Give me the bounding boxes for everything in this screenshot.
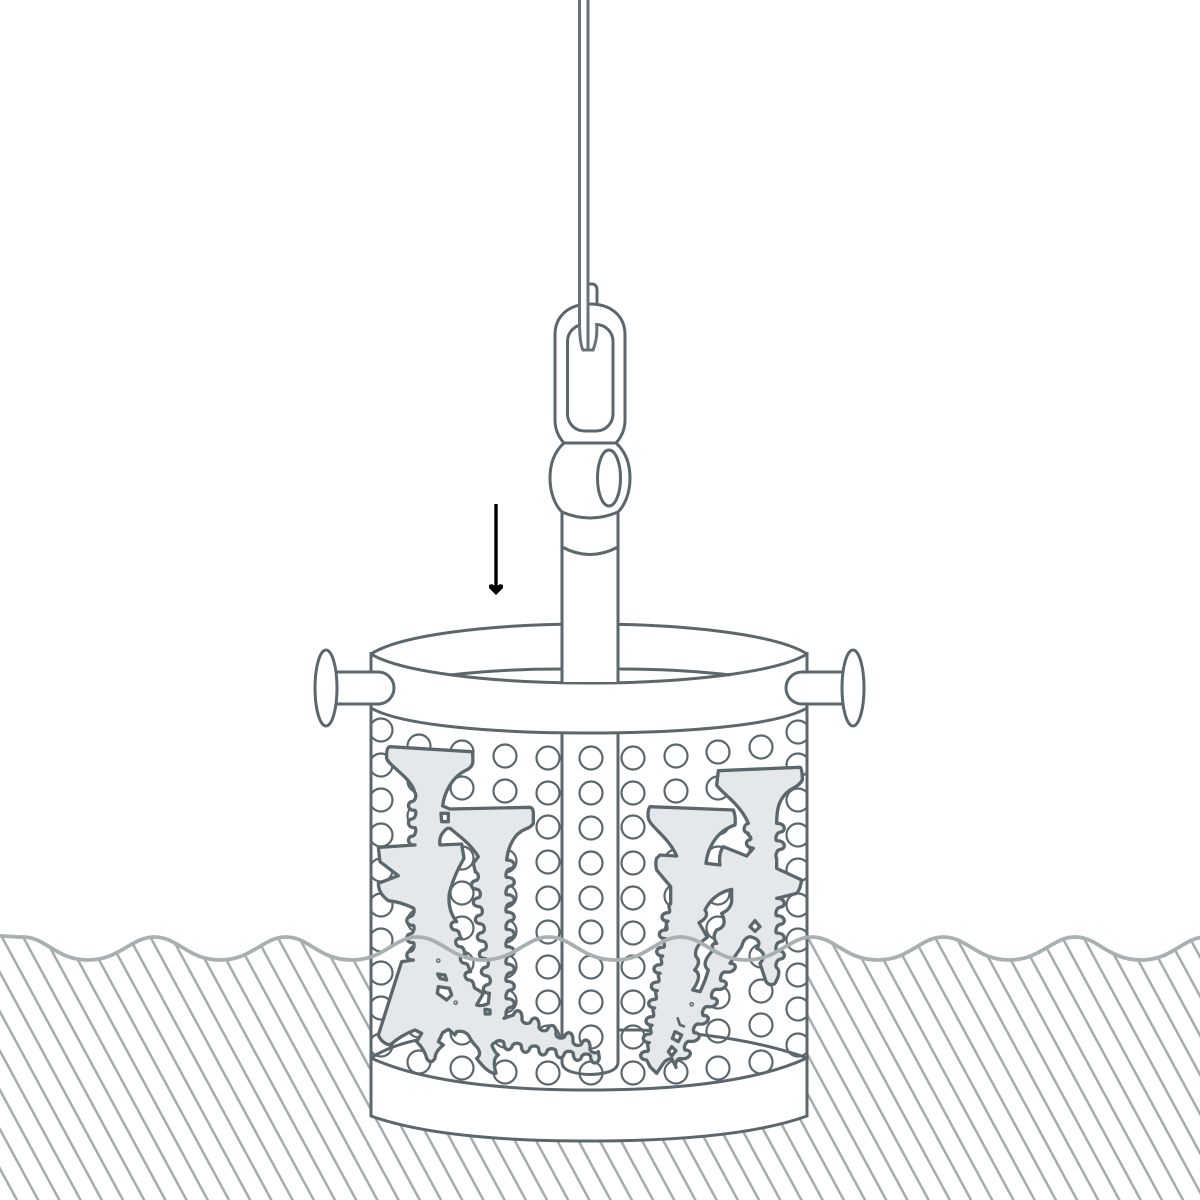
rope and hook xyxy=(580,0,597,350)
swivel ball xyxy=(550,443,630,518)
left handle pin xyxy=(315,650,394,726)
right handle pin xyxy=(786,650,864,726)
basket top rim xyxy=(371,610,807,733)
basket body xyxy=(371,654,807,1141)
upper pole and collar xyxy=(562,508,618,684)
arrow pointing down xyxy=(489,504,503,595)
liquid surface wave xyxy=(0,936,1200,960)
liquid hatching xyxy=(0,935,1200,1200)
lower pole inside basket xyxy=(562,733,618,1074)
hook tail behind link xyxy=(588,284,597,306)
ball eyelet xyxy=(598,450,620,506)
screws: right cluster xyxy=(641,767,802,1073)
basket floor and bottom band xyxy=(371,652,807,1141)
screws: left cluster xyxy=(378,747,599,1073)
basket perforations xyxy=(370,718,810,1084)
swivel link xyxy=(555,304,625,443)
